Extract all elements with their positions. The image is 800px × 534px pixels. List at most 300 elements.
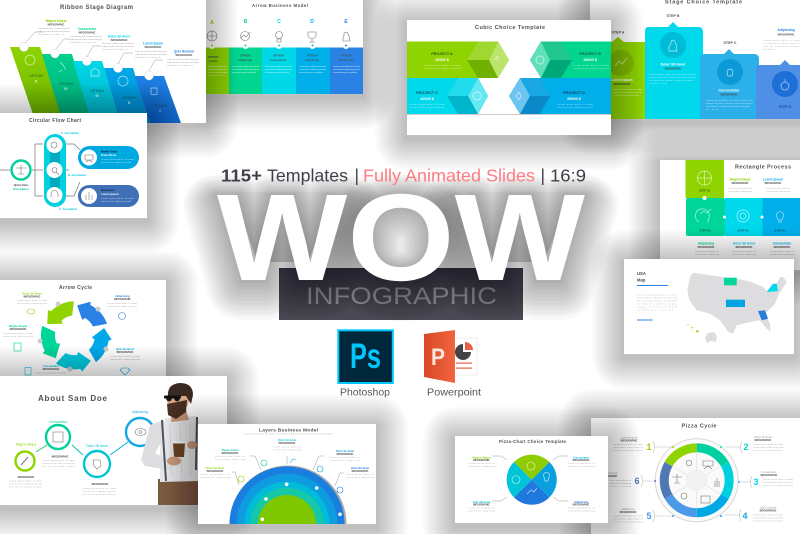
option labels: OPTION (122, 96, 136, 100)
cycle labels: Lorem ipsum dolor sit amet (107, 302, 137, 305)
layer labels: consectetur adipiscing (330, 459, 361, 462)
photo: bearded man with coffee (141, 383, 205, 505)
cycle numbers: 5 (646, 511, 652, 521)
step letters: C (277, 19, 281, 25)
chart labels: Magna Aliqua (472, 456, 491, 460)
blue pill: consectetur adipiscing elit (101, 161, 131, 164)
column text: consectetur adipiscing sed do (232, 68, 260, 71)
column labels: Adipiscing (305, 58, 319, 62)
stage blue: INFOGRAPHIC (721, 94, 738, 96)
project B band and cube (530, 42, 611, 78)
project A band and cube: Lorem ipsum dolor sit amet (424, 64, 461, 67)
cycle labels: Lorem ipsum dolor sit amet (36, 372, 66, 374)
cyan pill (44, 134, 66, 207)
cycle numbers: 2 (743, 442, 749, 452)
cycle labels: Quis Nostrud (601, 471, 618, 475)
stage green: consectetur adipiscing elit (613, 91, 642, 94)
column text: eiusmod tempor incididunt (265, 71, 289, 74)
state: New York (767, 284, 778, 292)
stage cyan (645, 22, 703, 119)
layer labels: Dolor Sit Amet (351, 466, 369, 470)
option labels: V (35, 80, 38, 84)
WOW headline: WOW (217, 178, 585, 316)
left scale circle (12, 160, 30, 180)
stage dark blue: STEP D (779, 105, 792, 109)
layer labels: INFOGRAPHIC (279, 442, 296, 445)
profile text: sed do eiusmod tempor (82, 493, 116, 496)
heading: Pizza Cycle: Pizza Cycle (682, 424, 716, 430)
layer labels: INFOGRAPHIC (337, 453, 354, 456)
panel: About Sam Doe (0, 376, 227, 505)
cycle labels: INFOGRAPHIC (621, 440, 638, 442)
chart labels: Quis Nostrud (473, 500, 491, 504)
panel: Pizza Cycle (591, 418, 800, 534)
adipiscing callout: incididunt (763, 48, 775, 51)
stage blue: Lorem ipsum dolor sit amet consectetur (706, 99, 753, 102)
profile text: sed do eiusmod tempor (42, 465, 75, 468)
callout text: incididunt ut labore et (167, 64, 193, 67)
project C band and cube: 10000 $ (420, 97, 435, 101)
infographic banner: INFOGRAPHIC (306, 283, 497, 310)
WOW headline: WOW (217, 168, 585, 306)
chart labels: consectetur adipiscing (568, 510, 596, 512)
WOW headline: WOW (217, 170, 585, 308)
option labels: I (160, 109, 161, 113)
cycle labels: INFOGRAPHIC (620, 511, 637, 514)
stage green: Lorem ipsum dolor sit amet (613, 88, 642, 91)
layer labels: consectetur adipiscing (200, 476, 231, 479)
heading: Cubic Choice Template: Cubic Choice Template (475, 25, 545, 31)
WOW headline: WOW (217, 172, 585, 310)
left circle label (13, 184, 29, 191)
cycle labels: Quis Nostrud (116, 347, 134, 351)
column text: consectetur adipiscing sed do (299, 68, 327, 71)
heading: Ribbon Stage Diagram: Ribbon Stage Diagram (60, 5, 133, 11)
project C band and cube: PROJECT C (416, 91, 438, 95)
icon: Powerpoint (424, 330, 477, 383)
pizza wheel (649, 434, 745, 527)
connector dots (209, 43, 349, 49)
column text: eiusmod tempor incididunt (333, 71, 357, 74)
bottom callouts: consectetur adipiscing (770, 253, 795, 256)
cycle labels: Lorem ipsum dolor sit amet (3, 332, 33, 335)
circle: Dolor Sit Amet (84, 451, 110, 477)
bottom callouts (695, 242, 795, 256)
blue pill: Lorem ipsum dolor sit amet (101, 158, 134, 161)
callout labels: INFOGRAPHIC (48, 24, 65, 26)
layered semicircles (230, 466, 346, 524)
bottom callouts: INFOGRAPHIC (698, 246, 715, 249)
short underline (637, 320, 652, 321)
dark blue pill (78, 185, 139, 207)
heading: About Sam Doe: About Sam Doe (38, 394, 108, 403)
column text: Lorem ipsum dolor sit amet elit (299, 65, 326, 68)
top callouts: Lorem ipsum dolor sit (766, 187, 790, 190)
stage cyan: incididunt ut labore et dolore magna (649, 79, 694, 82)
band bottom edge (407, 114, 611, 115)
callout text (38, 27, 199, 67)
layer labels: Lorem ipsum dolor sit (200, 473, 230, 476)
blue pill: Market Data (101, 150, 117, 154)
column labels: OPTION (273, 54, 284, 58)
column labels (208, 54, 353, 63)
alaska (705, 332, 717, 343)
map description: aliqua ut enim ad minim (637, 306, 677, 308)
callout labels: INFOGRAPHIC (111, 39, 128, 42)
cycle labels: consectetur adipiscing elit (107, 305, 137, 308)
stage blue: adipiscing elit sed do eiusmod tempor (706, 102, 753, 105)
column labels: OPTION (208, 55, 218, 59)
project D band and cube: Lorem ipsum dolor sit amet (557, 103, 593, 106)
connecting lines (36, 442, 128, 455)
project B band and cube: PROJECT B (579, 52, 601, 56)
step labels: STEP C (724, 41, 737, 45)
step labels (612, 14, 737, 45)
layer labels: Lorem ipsum dolor sit (346, 473, 374, 476)
top callouts (728, 178, 791, 193)
profile text: INFOGRAPHIC (92, 483, 109, 486)
chart labels: Lorem ipsum dolor sit (468, 506, 495, 510)
chart labels: Consectetur (573, 456, 590, 460)
stage cyan: Dolor Sit Amet (661, 62, 686, 66)
callout text: incididunt ut labore et (135, 56, 161, 59)
icon: Photoshop: Ps (350, 337, 381, 376)
cycle labels: sed do eiusmod tempor (613, 449, 643, 452)
stage cyan: INFOGRAPHIC (665, 68, 682, 70)
stage green: sed do eiusmod tempor (613, 94, 639, 97)
cycle labels (3, 292, 140, 374)
step 04 box: STEP 04 (774, 228, 786, 232)
layer labels: consectetur adipiscing (215, 458, 246, 461)
cycle labels: Adipiscing (622, 507, 635, 511)
cycle labels: sed do eiusmod tempor (753, 520, 783, 522)
subtitle: Lorem ipsum dolor sit amet consectetur adipiscing elit sed do eiusmod tempor (243, 432, 333, 436)
column text: Lorem ipsum dolor sit amet (208, 65, 227, 68)
profile text: sed do eiusmod tempor (9, 486, 42, 488)
tagline: 115+ (221, 166, 262, 186)
layer labels: INFOGRAPHIC (207, 470, 224, 473)
state: Georgia (758, 310, 768, 320)
cycle labels: Dolor Sit Amet (754, 435, 772, 439)
chart labels: INFOGRAPHIC (473, 504, 490, 506)
cycle labels: consectetur adipiscing elit (110, 358, 140, 361)
cycle numbers: 6 (634, 476, 640, 486)
step labels: STEP A (612, 30, 625, 34)
cycle labels: Magna Aliqua (9, 324, 27, 328)
tagline: Fully Animated Slides (363, 166, 535, 186)
project A band and cube: consectetur adipiscing elit (424, 67, 461, 70)
leader lines (25, 32, 163, 71)
cycle numbers: 4 (742, 511, 748, 521)
cycle labels: consectetur adipiscing elit (763, 481, 793, 484)
layer labels: Dolor Sit Amet (206, 466, 224, 470)
option labels: OPTION (153, 104, 167, 108)
option labels: OPTION (90, 89, 104, 93)
panel: Circular Flow Chart (0, 113, 147, 218)
project D band and cube: PROJECT D (563, 91, 585, 95)
cycle labels: Lorem ipsum dolor sit amet (613, 514, 643, 518)
callout labels: INFOGRAPHIC (176, 54, 193, 57)
column labels: Lorem (209, 59, 218, 63)
flow arrows (0, 144, 80, 196)
leader lines (232, 456, 344, 486)
heading: Circular Flow Chart: Circular Flow Chart (29, 118, 81, 124)
column text: eiusmod tempor incididunt (232, 71, 256, 74)
cycle labels: INFOGRAPHIC (24, 296, 41, 298)
callout text: adipiscing elit sed do eiusmod tempor (38, 30, 70, 33)
callout text: Lorem ipsum dolor sit amet consectetur (38, 27, 70, 30)
profile labels: Dolor Sit Amet (86, 444, 108, 448)
callout text: incididunt ut labore et (102, 48, 128, 51)
profile text: INFOGRAPHIC (18, 476, 35, 479)
annotations: B. Annotation (68, 173, 87, 177)
number dots (38, 302, 108, 372)
segment dots (654, 446, 740, 517)
stage blue (700, 49, 759, 119)
number brackets and leader lines (641, 441, 752, 522)
project C band and cube: Lorem ipsum dolor sit amet (409, 103, 445, 106)
top callouts: Lorem Ipsum (763, 178, 783, 182)
bottom callouts: consectetur adipiscing (695, 253, 720, 256)
cycle labels: consectetur adipiscing elit (753, 516, 783, 520)
column text: consectetur adipiscing sed do (265, 68, 293, 71)
column text (208, 65, 361, 77)
profile text: consectetur adipiscing elit (9, 482, 42, 486)
column text: consectetur adipiscing (208, 68, 228, 71)
layer labels: INFOGRAPHIC (352, 470, 369, 473)
chart labels: consectetur adipiscing (468, 465, 496, 468)
callout text: Lorem ipsum dolor sit amet consectetur (167, 58, 199, 61)
callout labels: INFOGRAPHIC (79, 32, 96, 34)
project A band and cube: 20000 $ (435, 58, 450, 62)
cycle labels: sed do eiusmod tempor (763, 484, 793, 487)
option labels: OPTION (59, 82, 73, 86)
stage cyan: aliqua enim (649, 83, 667, 85)
layer icons (238, 459, 343, 493)
project C band and cube (407, 78, 488, 114)
layer labels: INFOGRAPHIC (222, 452, 239, 455)
step letters (210, 19, 348, 26)
map description: veniam quis nostrud (637, 308, 674, 312)
cycle labels: consectetur adipiscing elit (753, 446, 783, 449)
chart labels: Lorem ipsum dolor sit (568, 506, 595, 510)
dark blue pill: Maecenas (101, 188, 115, 192)
step 01 box: STEP 01 (699, 188, 711, 192)
layer labels: Dolor Sit Amet (278, 438, 296, 442)
layer dots (260, 482, 342, 521)
top callouts: INFOGRAPHIC (765, 182, 782, 185)
circle: Adipiscing (126, 418, 154, 446)
profile text: Lorem ipsum dolor sit amet (9, 480, 42, 482)
heading: Arrow Business Model: Arrow Business Model (252, 3, 308, 8)
WOW headline: WOW (217, 177, 585, 315)
map description: Lorem ipsum dolor sit amet (637, 294, 677, 296)
layer labels: Magna Aliqua (222, 448, 239, 452)
cycle labels: consectetur adipiscing elit (3, 335, 33, 338)
heading: Arrow Cycle: Arrow Cycle (59, 285, 92, 291)
annotations: A. Annotation (61, 131, 80, 135)
ribbon icons (25, 55, 157, 95)
icons row (207, 31, 350, 42)
cycle labels: Dolor Sit Amet (22, 292, 42, 296)
adipiscing callout: Adipiscing (777, 28, 795, 32)
profile text (9, 456, 116, 496)
tagline: | (354, 166, 359, 186)
WOW headline: WOW (217, 173, 585, 311)
cycle labels: INFOGRAPHIC (755, 439, 772, 442)
state: Kansas (726, 300, 745, 307)
callout text: adipiscing elit sed do eiusmod tempor (70, 38, 102, 41)
infographic banner (279, 268, 523, 320)
icon: Photoshop (338, 330, 393, 383)
panel: USA Map (624, 259, 794, 354)
chart labels (468, 456, 596, 512)
cycle arrows (29, 295, 117, 381)
chart labels: consectetur adipiscing (468, 510, 496, 512)
column text: Lorem ipsum dolor sit amet elit (333, 65, 360, 68)
option labels: IV (64, 87, 68, 91)
adipiscing callout: Lorem ipsum dolor sit amet (763, 39, 800, 42)
column text: sed do eiusmod tempor (208, 71, 227, 74)
WOW headline: WOW (217, 175, 585, 313)
icon: Powerpoint: P (431, 344, 445, 371)
panel: Ribbon Stage Diagram (0, 0, 206, 123)
pizza chart (507, 455, 557, 505)
stage cyan: adipiscing elit sed do eiusmod tempor (649, 76, 696, 79)
dark blue pill: consectetur adipiscing elit (101, 200, 131, 203)
stage green: INFOGRAPHIC (614, 83, 631, 86)
column text: consectetur adipiscing sed do (333, 68, 361, 71)
map description (637, 294, 678, 312)
callout text: adipiscing elit sed do eiusmod tempor (167, 61, 199, 64)
column labels: OPTION (307, 54, 317, 58)
option labels (29, 74, 167, 113)
panel: Layers Business Model (198, 424, 376, 524)
step letters: B (244, 19, 248, 25)
heading: USA Map (637, 271, 646, 282)
adipiscing callout: sed do eiusmod tempor (763, 45, 800, 48)
left circle label: Option Sales (14, 184, 29, 187)
stage green: Lorem Ipsum (611, 78, 633, 82)
bottom callouts: Dolor Sit Amet (733, 242, 756, 246)
cycle labels: Lorem ipsum dolor sit amet (613, 443, 643, 446)
heading: USA Map: Map (637, 278, 646, 282)
blue pill (78, 146, 139, 169)
cycle labels: INFOGRAPHIC (43, 368, 60, 371)
bottom callouts: INFOGRAPHIC (774, 246, 791, 249)
project D band and cube: 25000 $ (567, 97, 582, 101)
callout labels: Magna Aliqua (46, 19, 67, 23)
cycle labels: consectetur adipiscing elit (613, 446, 643, 449)
option labels: II (128, 101, 130, 105)
layer labels: Lorem ipsum dolor sit (215, 455, 245, 458)
profile text: consectetur adipiscing elit (42, 462, 75, 465)
leader lines (492, 456, 568, 501)
adipiscing callout: INFOGRAPHIC (778, 34, 795, 36)
bottom callouts: INFOGRAPHIC (736, 246, 753, 249)
step 02 box: STEP 02 (699, 228, 711, 232)
chart labels: INFOGRAPHIC (573, 459, 590, 462)
project B band and cube: consectetur adipiscing elit (573, 67, 609, 70)
cycle labels: Adipiscing (115, 294, 130, 298)
callout labels: Quis Nostrud (174, 50, 194, 54)
step labels: STEP B (667, 14, 680, 18)
top callouts: consectetur adipiscing (766, 190, 791, 193)
map description: ut labore et dolore magna (637, 302, 678, 306)
cycle labels: Lorem ipsum dolor sit amet (110, 355, 140, 358)
dark blue pill: Lorem ipsum dolor sit amet (101, 197, 134, 200)
bottom callouts: Consectetur (773, 242, 792, 246)
callout text: adipiscing elit sed do eiusmod tempor (135, 53, 167, 56)
cycle labels: Consectetur (43, 364, 60, 368)
layer labels: Dolor Sit Amet (336, 449, 354, 453)
column labels: Adipiscing (238, 58, 252, 62)
top callouts: Lorem ipsum dolor sit (728, 187, 752, 190)
cycle labels: Quis Nostrud (760, 506, 777, 510)
profile labels: Consectetur (49, 420, 68, 424)
tagline: Templates (267, 166, 348, 186)
panel: Pizza-Chart Choice Template (455, 436, 608, 523)
chart labels: Lorem ipsum dolor sit (568, 462, 595, 465)
project B band and cube: 15000 $ (583, 58, 598, 62)
profile text: Lorem ipsum dolor sit amet (82, 487, 116, 490)
step 02 box (686, 198, 725, 236)
chart labels: INFOGRAPHIC (473, 459, 490, 462)
project D band and cube: consectetur adipiscing elit (557, 106, 593, 109)
option labels: III (96, 94, 98, 98)
tagline: | (540, 166, 545, 186)
stage blue: Consectetur (719, 88, 740, 92)
adipiscing callout: consectetur adipiscing elit (763, 42, 800, 45)
callout text: Lorem ipsum dolor sit amet consectetur (70, 35, 102, 38)
stage blue: incididunt ut labore et dolore magna (706, 105, 751, 108)
bottom callouts: consectetur adipiscing (732, 253, 757, 256)
layer labels (200, 438, 375, 479)
profile text: Lorem ipsum dolor sit amet (42, 459, 75, 462)
WOW headline: WOW (217, 169, 585, 307)
profile labels (16, 410, 148, 448)
WOW headline: WOW (217, 171, 585, 309)
step letters: E (344, 19, 348, 25)
bubbles (20, 42, 154, 80)
map of the USA (687, 273, 787, 343)
map description: do eiusmod tempor incididunt (637, 300, 677, 302)
cycle labels: sed do eiusmod (609, 486, 632, 488)
column labels: Consectetur (270, 58, 288, 62)
wheel icons (672, 460, 719, 503)
cycle labels: consectetur adipiscing elit (17, 302, 47, 305)
profile labels: Magna Aliqua (16, 442, 36, 446)
panel: Arrow Cycle (0, 280, 166, 386)
heading: Rectangle Process: Rectangle Process (735, 164, 791, 170)
hawaii (687, 324, 698, 332)
circle: Consectetur (46, 425, 70, 449)
top callouts: INFOGRAPHIC (732, 182, 749, 185)
heading: Layers Business Model: Layers Business Model (259, 428, 318, 434)
cycle labels (601, 435, 793, 524)
tagline (221, 166, 586, 186)
map description: consectetur adipiscing elit sed (637, 296, 678, 300)
layer labels: Lorem ipsum dolor sit (273, 446, 301, 448)
dark blue pill: Lorem Ipsum (101, 192, 119, 196)
label: Powerpoint: Powerpoint (427, 386, 481, 398)
cycle numbers: 3 (753, 477, 759, 487)
profile text: INFOGRAPHIC (52, 456, 69, 458)
WOW headline: WOW (217, 176, 585, 314)
cycle labels: Lorem Ipsum (621, 436, 638, 440)
cycle labels: INFOGRAPHIC (760, 510, 777, 512)
project D band and cube (509, 78, 611, 114)
